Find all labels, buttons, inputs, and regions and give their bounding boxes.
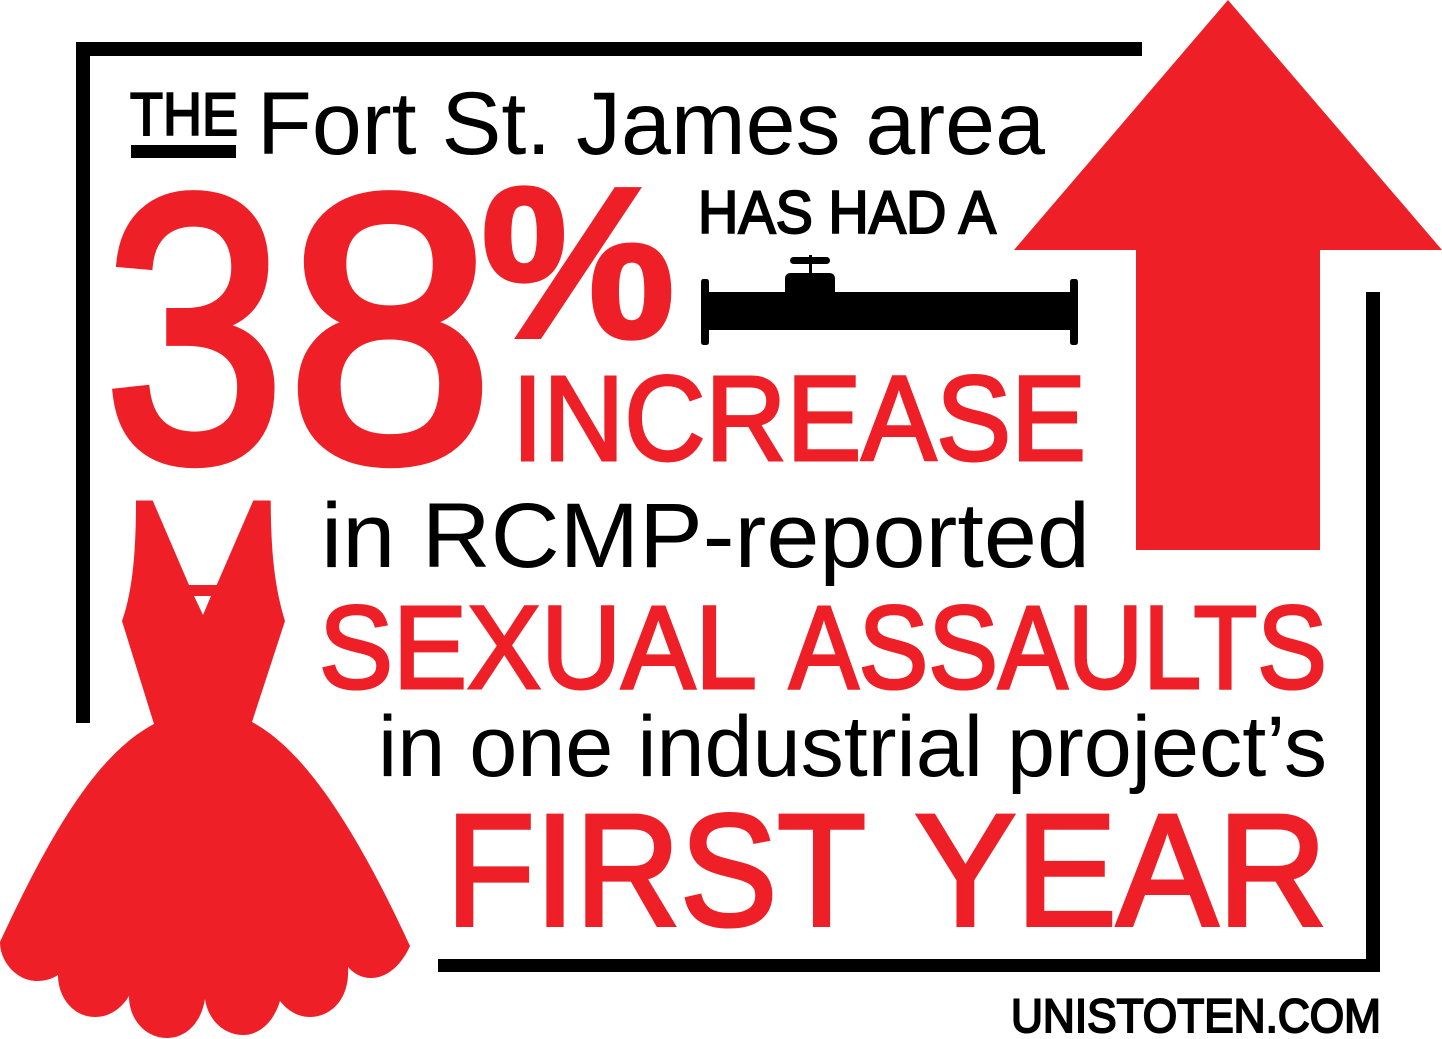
- text: Fort St. James area: Fort St. James area: [257, 73, 1045, 173]
- headline: FIRST YEAR: [446, 781, 1327, 959]
- headline: SEXUAL ASSAULTS: ASSAULTS: [789, 582, 1327, 714]
- icon: red dress: [0, 500, 410, 1038]
- text: HAS HAD A: HAS HAD A: [698, 179, 996, 246]
- big number: 38%: %: [481, 142, 675, 383]
- frame: bottom right bracket: [438, 292, 1380, 972]
- icon: red up arrow: [1014, 0, 1442, 550]
- text: in one industrial project's: in one industrial project’s: [378, 699, 1327, 795]
- headline: FIRST YEAR: FIRST: [446, 781, 866, 959]
- headline: SEXUAL ASSAULTS: [319, 582, 1327, 714]
- word: THE: THE: [130, 81, 238, 148]
- headline: FIRST YEAR: YEAR: [915, 781, 1327, 959]
- heading: The Fort St. James area: [130, 73, 1045, 173]
- big number: 38%: [104, 116, 675, 541]
- big number: 38%: 8: [286, 116, 494, 541]
- headline: SEXUAL ASSAULTS: SEXUAL: [319, 582, 757, 714]
- frame: top left bracket: [76, 42, 1142, 723]
- big number: 38%: 3: [104, 116, 285, 541]
- text: in RCMP-reported: in RCMP-reported: [321, 485, 1090, 587]
- icon: pipeline with valve: [701, 255, 1078, 345]
- underline bar: [131, 145, 236, 158]
- headline: INCREASE: INCREASE: [512, 350, 1086, 486]
